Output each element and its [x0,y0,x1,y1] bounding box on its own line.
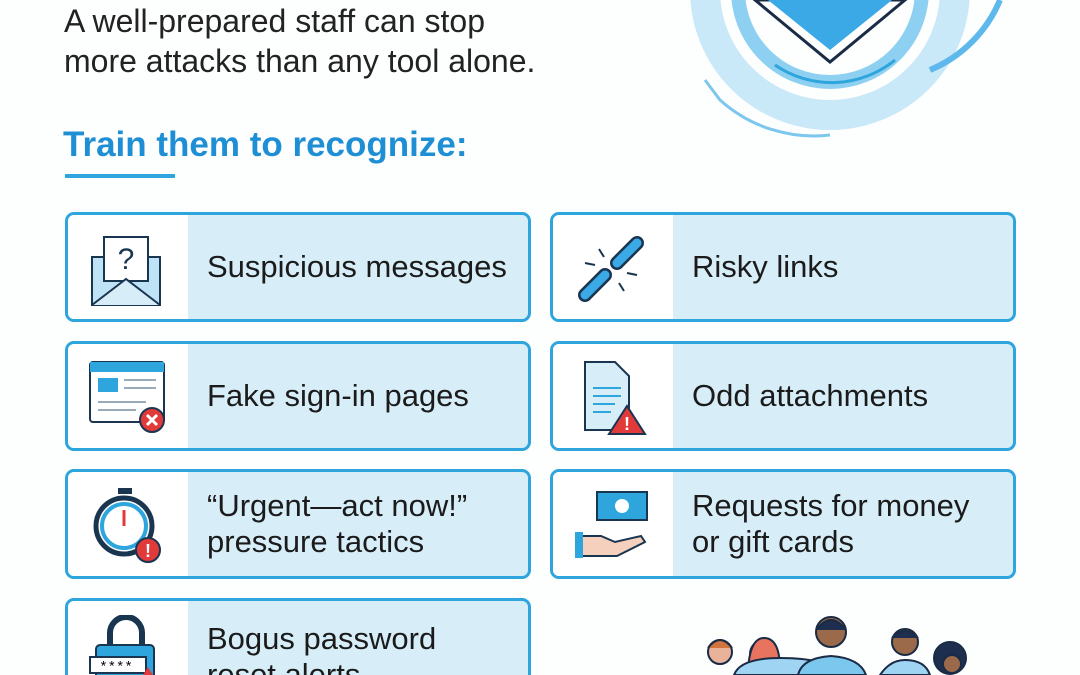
shield graphic [690,0,1003,138]
card: money requests: Requests for money [692,488,969,523]
card: bogus password reset: Bogus password [207,621,436,656]
people illustration [707,616,967,675]
card: urgent pressure: “Urgent—act now!” [207,488,467,523]
card: urgent pressure [65,469,531,579]
card: suspicious messages: Suspicious messages [207,249,507,284]
card: urgent pressure: pressure tactics [207,524,424,559]
card: bogus password reset [65,598,531,675]
card: money requests [550,469,1016,579]
card: money requests: or gift cards [692,524,854,559]
intro text: A well-prepared staff can stop [64,3,485,39]
card: suspicious messages: ? [118,243,134,276]
intro text [64,3,535,79]
heading underline [65,174,175,178]
card: fake sign-in pages: Fake sign-in pages [207,378,469,413]
card: risky links: Risky links [692,249,838,284]
card: odd attachments [550,341,1016,451]
card: suspicious messages [65,212,531,322]
card: fake sign-in pages [65,341,531,451]
card: urgent pressure: ! [145,541,151,561]
heading: Train them to recognize: [63,125,468,164]
card: risky links [550,212,1016,322]
intro text: more attacks than any tool alone. [64,43,535,79]
card: odd attachments: Odd attachments [692,378,928,413]
card: odd attachments: ! [624,414,630,434]
